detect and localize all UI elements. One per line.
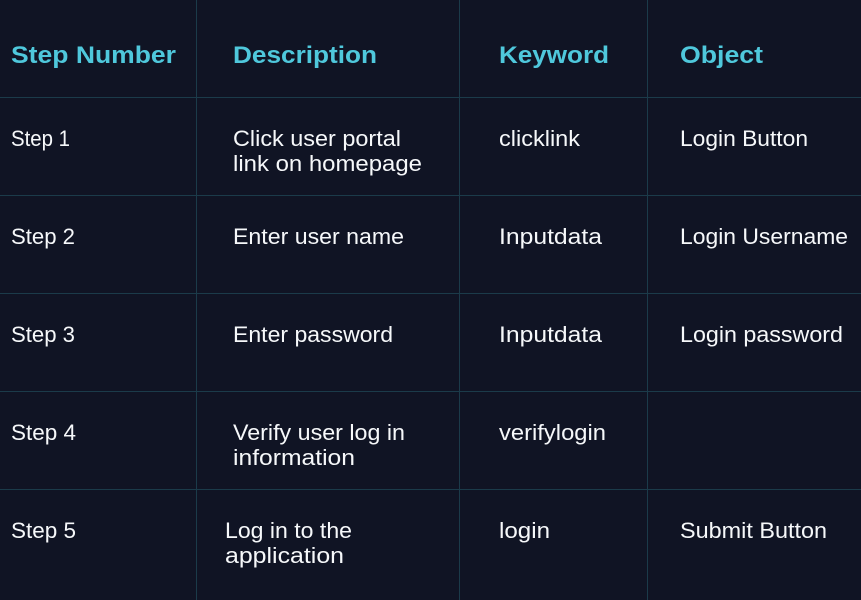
row: step 4: Verify user log in — [233, 420, 405, 445]
table header row: Step Number — [11, 42, 176, 69]
row: step 1: Step 1 — [11, 126, 70, 151]
row: step 4: verifylogin — [499, 420, 606, 445]
row: step 1: Login Button — [680, 126, 808, 151]
row: step 2: Inputdata — [499, 224, 603, 249]
row: step 3: Enter password — [233, 322, 393, 347]
row: step 5: Log in to the — [225, 518, 352, 543]
row: step 1: clicklink — [499, 126, 581, 151]
row: step 4: Step 4 — [11, 420, 76, 445]
table header row: Description — [233, 42, 377, 69]
table header row — [11, 42, 763, 69]
row: step 4: information — [233, 445, 355, 470]
row: step 3: Inputdata — [499, 322, 603, 347]
row: step 3 — [11, 322, 843, 347]
row: step 5 — [11, 518, 827, 568]
table header row: Keyword — [499, 42, 609, 69]
row: step 3: Step 3 — [11, 322, 75, 347]
table header row: Object — [680, 42, 763, 69]
row: step 3: Login password — [680, 322, 843, 347]
row: step 1 — [11, 126, 808, 176]
row: step 2: Enter user name — [233, 224, 404, 249]
row: step 2: Step 2 — [11, 224, 75, 249]
row: step 2: Login Username — [680, 224, 848, 249]
row: step 1: link on homepage — [233, 151, 422, 176]
row: step 5: Submit Button — [680, 518, 827, 543]
row: step 5: Step 5 — [11, 518, 76, 543]
row: step 5: application — [225, 543, 344, 568]
row: step 1: Click user portal — [233, 126, 401, 151]
row: step 2 — [11, 224, 848, 249]
row: step 4 — [11, 420, 606, 470]
row: step 5: login — [499, 518, 550, 543]
